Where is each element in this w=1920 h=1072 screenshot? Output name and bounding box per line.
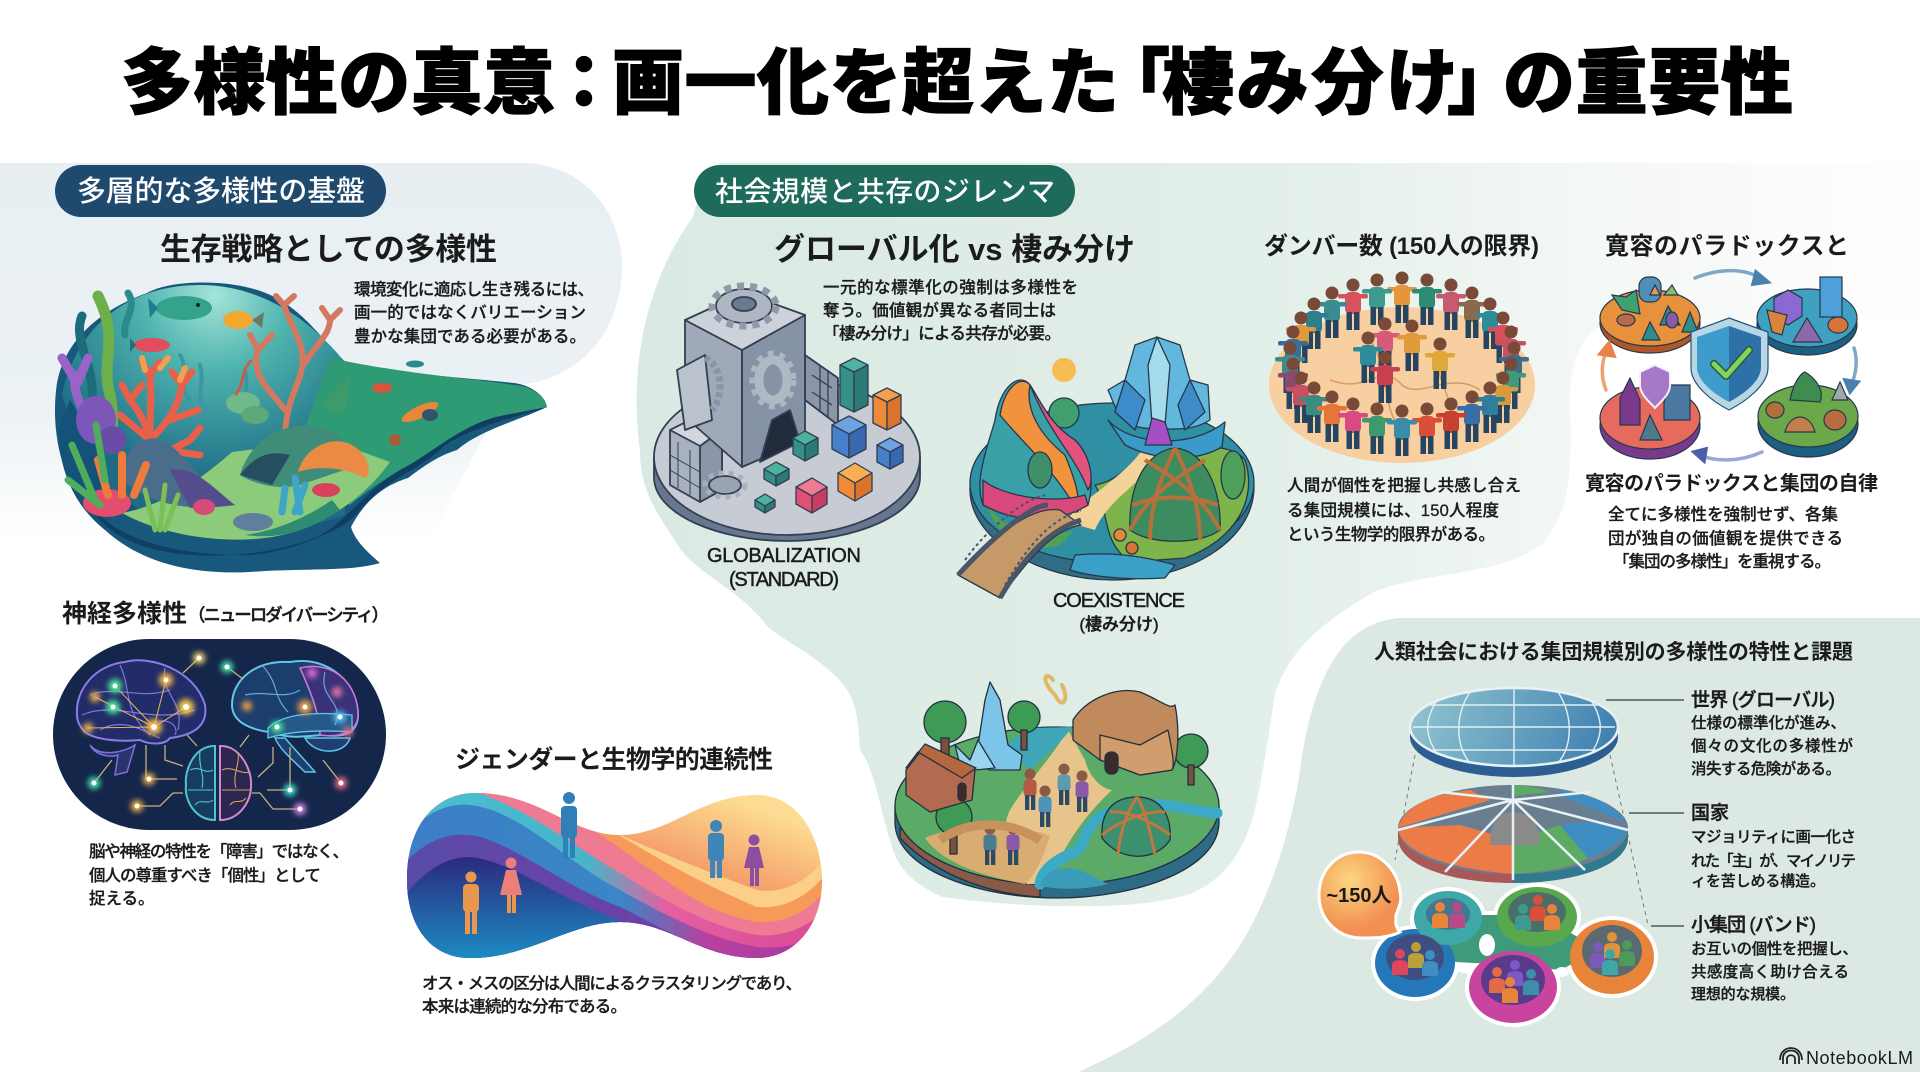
center brain	[186, 746, 251, 820]
bridge	[958, 510, 1081, 598]
label: world: 消失する危険がある。	[1691, 759, 1841, 778]
text: tolerance paradox: 団が独自の価値観を提供できる	[1608, 528, 1843, 548]
text: neurodiversity: 脳や神経の特性を「障害」ではなく、	[89, 842, 349, 861]
logo: NotebookLM: NotebookLM	[1806, 1048, 1913, 1068]
illustration: layered scale diagram	[1319, 688, 1684, 1027]
label: world: 世界 (グローバル)	[1691, 689, 1835, 711]
gears	[716, 289, 772, 323]
label: world: 個々の文化の多様性が	[1691, 736, 1853, 755]
label: band: お互いの個性を把握し、	[1691, 940, 1858, 958]
illustration: village island	[895, 676, 1219, 898]
text: survival strategy	[354, 279, 594, 346]
text: globalization: 一元的な標準化の強制は多様性を	[823, 278, 1078, 297]
shield	[1691, 318, 1768, 410]
left brain	[77, 660, 205, 775]
crystal	[975, 682, 1022, 770]
text: dunbar number	[1287, 475, 1521, 544]
label: band: 小集団 (バンド)	[1691, 914, 1816, 936]
background kelp	[180, 355, 250, 415]
label: globalization: GLOBALIZATION	[707, 545, 861, 567]
text: gender	[422, 974, 802, 1016]
label: world	[1691, 689, 1853, 778]
label: coexistence	[1053, 590, 1185, 634]
arrows: paradox cycle	[1600, 271, 1858, 461]
adobe	[1073, 691, 1178, 775]
band blob	[1371, 883, 1658, 1027]
heading: group scale: 人類社会における集団規模別の多様性の特性と課題	[1374, 641, 1853, 664]
figures	[561, 792, 577, 858]
text: globalization: 奪う。価値観が異なる者同士は	[823, 300, 1056, 320]
subheading: tolerance paradox: 寛容のパラドックスと集団の自律	[1585, 472, 1878, 495]
panel background: foundations	[0, 163, 622, 560]
small block	[670, 415, 722, 502]
text: globalization: 「棲み分け」による共存が必要。	[823, 323, 1061, 343]
heading: gender: ジェンダーと生物学的連続性	[455, 745, 773, 774]
text: gender: オス・メスの区分は人間によるクラスタリングであり、	[422, 974, 802, 993]
title: 「	[1098, 44, 1170, 124]
right brain	[232, 661, 358, 772]
text: survival strategy: 環境変化に適応し生き残るには、	[354, 279, 594, 299]
text: neurodiversity	[89, 842, 349, 908]
title	[121, 44, 1793, 124]
section badge: society	[694, 165, 1075, 217]
house	[906, 746, 975, 812]
heading: globalization vs coexistence: グローバル化 vs 棲み分け	[774, 232, 1135, 267]
illustration: paradox cycle	[1600, 277, 1858, 459]
text: tolerance paradox: 全てに多様性を強制せず、各集	[1608, 505, 1838, 524]
illustration: coexistence island	[958, 337, 1254, 598]
seaweed	[98, 296, 113, 445]
rocks and plants	[122, 438, 235, 508]
illustration: globalization machine	[654, 286, 920, 541]
title: 多様性の真意	[121, 44, 555, 124]
dashed connectors	[1395, 755, 1648, 925]
section badge: foundations: 多層的な多様性の基盤	[77, 175, 365, 208]
text: neurodiversity: 個人の尊重すべき「個性」として	[89, 866, 321, 885]
connector lines	[94, 658, 341, 809]
red coral	[120, 362, 200, 470]
text: neurodiversity: 捉える。	[89, 889, 155, 908]
label: globalization: (STANDARD)	[729, 569, 839, 591]
nation disc	[1398, 785, 1628, 883]
label: coexistence: (棲み分け)	[1079, 615, 1159, 634]
panel background: social scale	[637, 163, 1920, 906]
heading: neurodiversity: （ニューロダイバーシティ）	[188, 605, 389, 625]
panel background: group scale	[1078, 618, 1920, 1072]
text: globalization	[823, 278, 1078, 343]
heading: neurodiversity	[62, 600, 389, 628]
section badge: foundations	[55, 165, 386, 217]
label: world: 仕様の標準化が進み、	[1691, 713, 1846, 732]
label: nation: ィを苦しめる構造。	[1691, 872, 1825, 890]
text: dunbar number: 人間が個性を把握し共感し合え	[1287, 475, 1521, 495]
tower	[685, 320, 742, 467]
text: gender: 本来は連続的な分布である。	[422, 997, 627, 1016]
trees	[924, 701, 966, 743]
label: globalization	[707, 545, 861, 591]
callout: ~150 people	[1319, 852, 1401, 938]
text: survival strategy: 豊かな集団である必要がある。	[354, 326, 586, 346]
heading: tolerance paradox: 寛容のパラドックスと	[1605, 233, 1849, 260]
title: の重要性	[1503, 44, 1793, 124]
tall coral	[250, 296, 340, 440]
label: band: 共感度高く助け合える	[1691, 963, 1849, 981]
leader lines	[1606, 700, 1684, 926]
text: dunbar number: という生物学的限界がある。	[1287, 524, 1495, 544]
text: survival strategy: 画一的ではなくバリエーション	[354, 303, 586, 322]
illustration: gender continuum	[407, 792, 822, 958]
illustration: coral reef	[55, 283, 547, 572]
heading: survival strategy: 生存戦略としての多様性	[160, 232, 497, 267]
organic mound	[1049, 398, 1079, 428]
label: coexistence: COEXISTENCE	[1053, 590, 1185, 612]
globe disc	[1410, 688, 1618, 777]
illustration: neural brains	[53, 639, 386, 830]
side wing	[677, 355, 712, 430]
crystals	[1108, 420, 1225, 458]
leaves	[226, 392, 260, 414]
heading: neurodiversity: 神経多様性	[62, 600, 187, 628]
label: nation: マジョリティに画一化さ	[1691, 828, 1856, 846]
dome	[1130, 448, 1220, 541]
section badge: society: 社会規模と共存のジレンマ	[715, 176, 1055, 207]
dome	[1102, 797, 1170, 856]
label: band: 理想的な規模。	[1691, 985, 1795, 1003]
title: 棲み分け	[1162, 44, 1458, 124]
text: dunbar number: る集団規模には、150人程度	[1287, 501, 1499, 520]
heading: dunbar number: ダンバー数 (150人の限界)	[1264, 232, 1539, 260]
sun	[1052, 358, 1076, 382]
text: tolerance paradox	[1608, 505, 1843, 571]
title: 」	[1447, 44, 1519, 124]
label: nation: 国家	[1691, 802, 1729, 824]
label: band	[1691, 914, 1858, 1003]
text: tolerance paradox: 「集団の多様性」を重視する。	[1613, 552, 1831, 571]
title: 画一化を超えた	[612, 44, 1119, 124]
cubes	[755, 358, 903, 513]
illustration: dunbar circle	[1269, 272, 1535, 463]
fish	[148, 296, 212, 320]
title: ：	[548, 44, 620, 124]
logs	[940, 825, 1040, 840]
callout: ~150 people: ~150人	[1326, 885, 1392, 907]
label: nation	[1691, 802, 1856, 890]
back wing	[805, 355, 838, 425]
people	[984, 764, 1088, 865]
label: nation: れた「主」が、マイノリテ	[1691, 851, 1856, 870]
purple coral	[62, 358, 90, 430]
